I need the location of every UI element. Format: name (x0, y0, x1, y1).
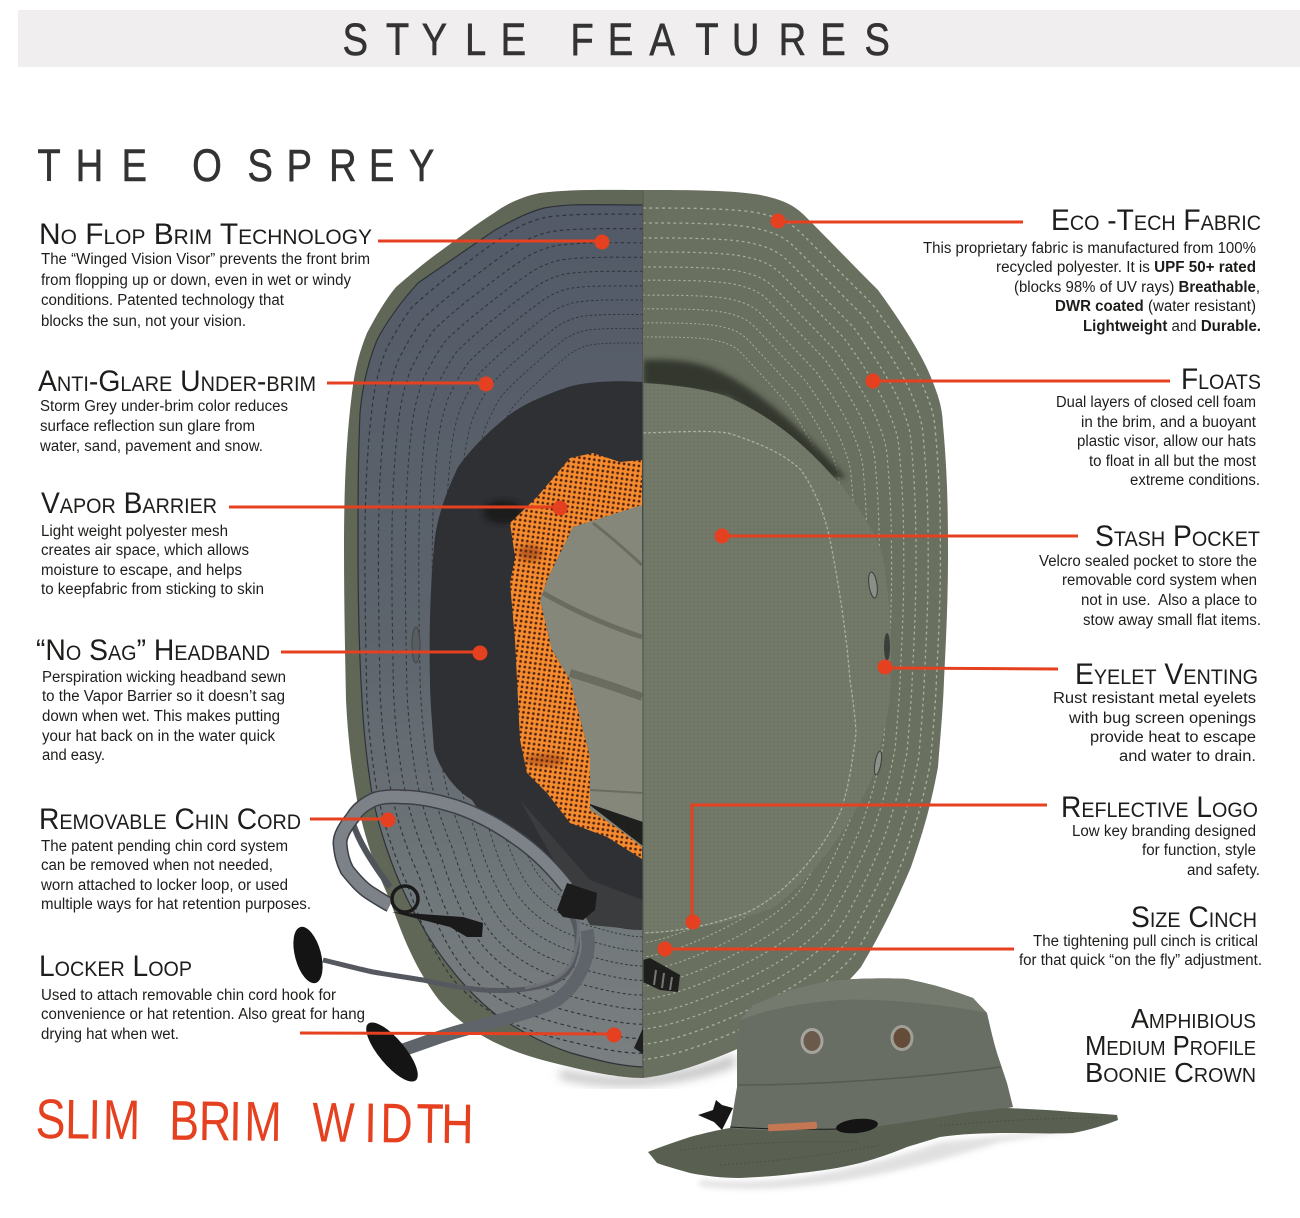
callout: removable chin cord: can be removed when not needed, (41, 857, 273, 874)
callout: vapor barrier: to keepfabric from sticking to skin (41, 581, 264, 598)
cord lock (557, 883, 597, 920)
callout: reflective logo: and safety. (1187, 862, 1260, 879)
callout: no flop brim technology: No Flop Brim Technology (39, 218, 372, 251)
heading: slim brim width: SLIM BRIM WIDTH (35, 1087, 474, 1155)
pocket stitch (642, 431, 856, 933)
callout: vapor barrier: Vapor Barrier (41, 487, 217, 520)
callout: stash pocket: Velcro sealed pocket to store the (1039, 553, 1257, 570)
hook (392, 912, 483, 937)
callout: reflective logo: Reflective Logo (1061, 791, 1258, 824)
callout: reflective logo (686, 791, 1260, 930)
toggle disc 2 (358, 1015, 426, 1089)
eyelets (802, 1030, 822, 1052)
callout: eyelet venting: provide heat to escape (1090, 729, 1256, 746)
crown band seam (738, 1067, 1001, 1085)
label: amphibious medium profile boonie crown (1085, 1003, 1256, 1088)
crown (730, 978, 1013, 1133)
callout: reflective logo: for function, style (1142, 842, 1256, 859)
label: amphibious medium profile boonie crown: Medium Profile (1085, 1030, 1256, 1061)
callout: eco-tech fabric: DWR coated (water resistant) (1055, 298, 1256, 315)
callout: eyelet venting: Eyelet Venting (1075, 658, 1258, 691)
callout: eco-tech fabric: recycled polyester. It is UPF 50+ rated (996, 259, 1256, 276)
brim (648, 1108, 1118, 1178)
callout: vapor barrier: creates air space, which allows (41, 542, 249, 559)
callout: locker loop: drying hat when wet. (41, 1026, 179, 1043)
callout: anti-glare under-brim: Storm Grey under-brim color reduces (40, 398, 288, 415)
callout: eyelet venting: with bug screen openings (1068, 710, 1256, 727)
callout: size cinch: The tightening pull cinch is critical (1033, 933, 1258, 950)
callout: stash pocket: not in use. Also a place to (1081, 592, 1257, 609)
callout: removable chin cord: worn attached to locker loop, or used (40, 877, 288, 894)
crown (642, 383, 891, 933)
callout: eyelet venting (878, 658, 1258, 765)
callout: floats: Floats (1181, 363, 1261, 396)
callout: eco-tech fabric: Eco -Tech Fabric (1051, 204, 1261, 237)
callout: locker loop: Locker Loop (39, 950, 192, 983)
callout: vapor barrier: moisture to escape, and helps (41, 562, 242, 579)
crown interior (540, 503, 643, 848)
callout: anti-glare under-brim: surface reflection sun glare from (40, 418, 255, 435)
title banner: STYLE FEATURES (343, 14, 890, 65)
orange vapor barrier mesh (510, 453, 642, 859)
hat shadow (560, 1055, 735, 1086)
label: amphibious medium profile boonie crown: Amphibious (1131, 1003, 1256, 1034)
callout: anti-glare under-brim: Anti-Glare Under-brim (38, 365, 316, 398)
heading: the osprey: THE OSPREY (37, 140, 434, 191)
callout: vapor barrier: Light weight polyester mesh (41, 523, 228, 540)
callout: stash pocket: Stash Pocket (1095, 520, 1260, 553)
left half: under-brim (344, 190, 643, 1078)
callout: no sag headband (36, 634, 488, 764)
callout: eyelet venting: Rust resistant metal eyelets (1053, 690, 1256, 707)
leather logo (768, 1122, 817, 1131)
callout: no sag headband: your hat back on in the water quick (42, 728, 275, 745)
callout: removable chin cord: The patent pending chin cord system (41, 838, 288, 855)
size cinch toggle (643, 958, 680, 992)
hat seam pucker (412, 627, 420, 663)
callout: floats: plastic visor, allow our hats (1077, 433, 1256, 450)
callout: floats: to float in all but the most (1089, 453, 1257, 470)
callout: eco-tech fabric (770, 204, 1261, 335)
callout: no sag headband: down when wet. This makes putting (42, 708, 280, 725)
right half: outer brim (642, 190, 948, 1078)
callout: eyelet venting: and water to drain. (1119, 748, 1256, 765)
callout: size cinch (658, 901, 1262, 969)
callout: no sag headband: “No Sag” Headband (36, 634, 270, 667)
callout: locker loop (39, 950, 622, 1043)
label: amphibious medium profile boonie crown: Boonie Crown (1085, 1057, 1256, 1088)
callout: no flop brim technology (39, 218, 610, 330)
callout: removable chin cord: Removable Chin Cord (39, 803, 301, 836)
callout: vapor barrier (41, 487, 568, 598)
callout: stash pocket: stow away small flat items. (1083, 612, 1261, 629)
toggle disc 1 (288, 924, 328, 986)
callout: floats: extreme conditions. (1130, 472, 1260, 489)
centre seam (642, 190, 644, 1078)
callout: floats: Dual layers of closed cell foam (1056, 394, 1256, 411)
callout: reflective logo: Low key branding designed (1072, 823, 1256, 840)
callout: size cinch: for that quick “on the fly” adjustment. (1019, 952, 1262, 969)
main hat: split view underside and top (288, 190, 948, 1089)
toggle (835, 1117, 879, 1135)
callout: locker loop: Used to attach removable chin cord hook for (41, 987, 336, 1004)
callout: size cinch: Size Cinch (1131, 901, 1257, 934)
callout: stash pocket (714, 520, 1261, 629)
callout: floats: in the brim, and a buoyant (1081, 414, 1257, 431)
callout: no flop brim technology: blocks the sun, not your vision. (41, 313, 246, 330)
callout: no sag headband: and easy. (42, 747, 105, 764)
crown top panel (740, 978, 987, 1020)
callout: floats (866, 363, 1261, 489)
callout: eco-tech fabric: Lightweight and Durable. (1083, 318, 1261, 335)
callout: anti-glare under-brim: water, sand, pavement and snow. (39, 438, 263, 455)
callout: anti-glare under-brim (38, 365, 494, 455)
callout: eco-tech fabric: (blocks 98% of UV rays) Breathable, (1014, 279, 1260, 296)
eyelets (868, 572, 878, 598)
hook ring (392, 886, 418, 912)
title banner (18, 10, 1300, 67)
crown shadow (643, 360, 846, 478)
callout: removable chin cord (39, 803, 396, 913)
small side-view hat (648, 978, 1118, 1189)
headband (430, 381, 643, 930)
cord lock (698, 1100, 733, 1130)
chin cord (288, 797, 597, 1089)
callout: no flop brim technology: from flopping up or down, even in wet or windy (41, 272, 351, 289)
callout: stash pocket: removable cord system when (1062, 572, 1257, 589)
callout: no sag headband: Perspiration wicking headband sewn (42, 669, 286, 686)
chin cord line (730, 1127, 840, 1129)
callout: removable chin cord: multiple ways for hat retention purposes. (41, 896, 311, 913)
callout: locker loop: convenience or hat retention. Also great for hang (41, 1006, 365, 1023)
callout: eco-tech fabric: This proprietary fabric is manufactured from 100% (923, 240, 1256, 257)
locker loop tab (634, 1028, 643, 1054)
callout: no sag headband: to the Vapor Barrier so it doesn’t sag (42, 688, 285, 705)
callout: no flop brim technology: conditions. Patented technology that (41, 292, 285, 309)
callout: no flop brim technology: The “Winged Vision Visor” prevents the front brim (41, 251, 370, 268)
